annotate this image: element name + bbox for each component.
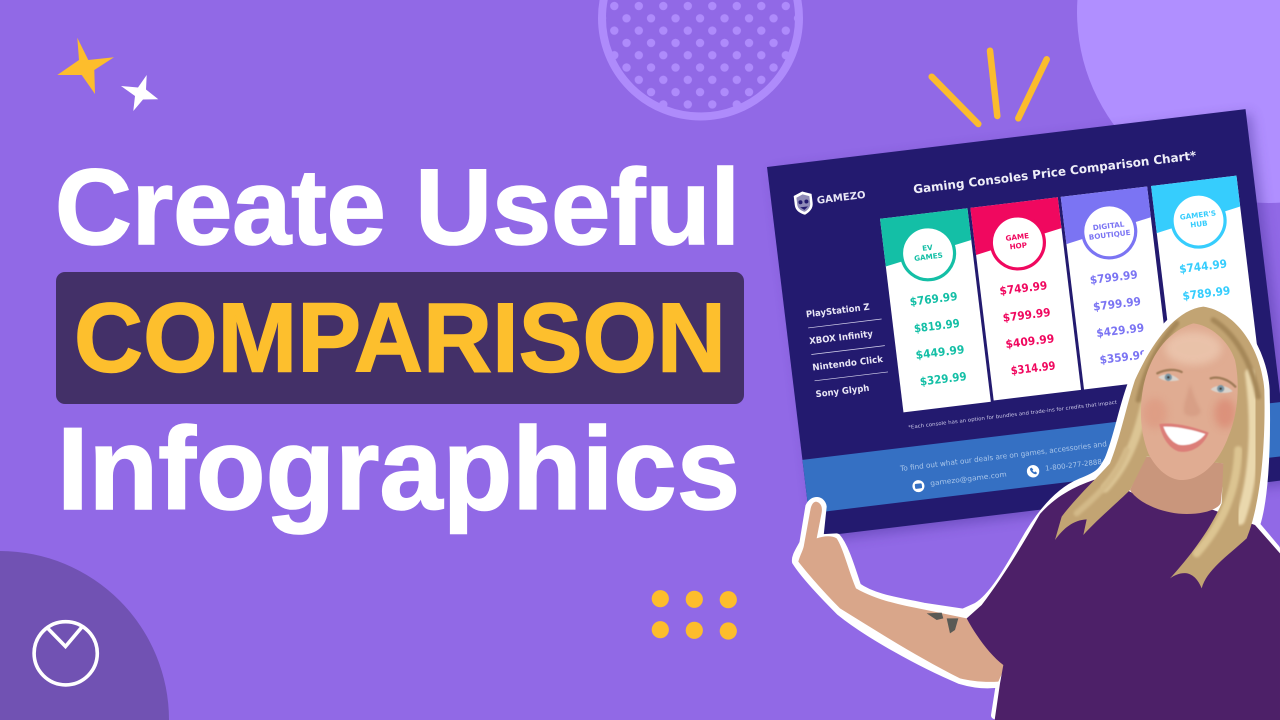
smile — [1159, 424, 1209, 452]
column: Digital Boutique: BOUTIQUE — [1088, 228, 1131, 242]
poster heading: Gaming Consoles Price Comparison Chart* — [912, 148, 1198, 197]
contact band: To find out what our deals are on games, accessories and — [899, 439, 1108, 473]
column: Gamer's Hub: $789.99 — [1182, 283, 1231, 303]
icon: white star — [121, 75, 158, 111]
contact band — [802, 402, 1280, 513]
decorative circle: bottom left — [0, 551, 169, 720]
row labels: XBOX Infinity — [809, 330, 874, 347]
column: Game Hop: $749.99 — [999, 278, 1048, 298]
column: Game Hop — [970, 197, 1081, 400]
blonde hair — [1055, 307, 1265, 588]
highlight banner: COMPARISON: COMPARISON — [74, 282, 726, 392]
arm and pointing hand — [798, 502, 1007, 682]
column: Game Hop: $799.99 — [1002, 305, 1051, 325]
title line: Create Useful: Create Useful — [55, 146, 740, 267]
presenter cut-out: smiling woman pointing — [796, 305, 1280, 720]
eyebrows — [1157, 370, 1182, 373]
row labels — [806, 301, 890, 400]
row labels: Nintendo Click — [812, 355, 885, 373]
poster logo: GAMEZO: GAMEZO — [816, 190, 866, 207]
column: Gamer's Hub — [1151, 176, 1260, 379]
poster logo: GAMEZO — [793, 184, 867, 216]
column: Digital Boutique — [1061, 186, 1170, 390]
white sticker outline — [796, 305, 1276, 715]
row labels: Sony Glyph — [815, 384, 870, 400]
column: Digital Boutique: $799.99 — [1089, 267, 1138, 287]
column: Digital Boutique: $799.99 — [1092, 294, 1142, 314]
footnote: *Each console has an option for bundles and trade-ins for credits that impact — [908, 400, 1117, 431]
column: EV Games: $449.99 — [915, 342, 965, 362]
column: EV Games: EV — [922, 243, 934, 253]
icon: yellow star — [57, 38, 114, 94]
tattoo — [927, 613, 958, 633]
contact band: gamezo@game.com — [930, 470, 1007, 488]
purple t-shirt — [967, 477, 1280, 720]
row labels: PlayStation Z — [806, 303, 871, 320]
contact band: 1-800-277-2888 — [1045, 458, 1102, 473]
poster drop shadow — [773, 113, 1280, 542]
column: EV Games: GAMES — [914, 251, 943, 263]
column: Digital Boutique: $359.99 — [1099, 347, 1148, 367]
column: EV Games — [880, 208, 991, 412]
panel: tilted price comparison poster — [767, 109, 1280, 537]
column: Gamer's Hub: GAMER'S — [1179, 208, 1217, 222]
brand logo: clock icon — [34, 622, 97, 685]
column: Digital Boutique: DIGITAL — [1092, 219, 1125, 232]
column: EV Games: $769.99 — [909, 289, 958, 309]
decorative yellow dot grid — [652, 590, 737, 640]
icon: yellow spark lines — [932, 51, 1047, 124]
column: Game Hop: $314.99 — [1010, 358, 1056, 378]
column: Gamer's Hub: HUB — [1190, 219, 1208, 230]
title line: Infographics: Infographics — [57, 403, 740, 534]
column: Game Hop: HOP — [1009, 240, 1027, 251]
decorative dotted circle: top — [602, 0, 800, 117]
column: EV Games: $819.99 — [913, 316, 960, 335]
column: Digital Boutique: $429.99 — [1096, 320, 1145, 340]
neck — [1130, 457, 1225, 514]
column: EV Games: $329.99 — [919, 369, 967, 389]
column: Game Hop: $409.99 — [1005, 331, 1055, 351]
face — [1141, 323, 1238, 480]
decorative circle: top right — [1077, 0, 1280, 203]
eyes — [1158, 374, 1179, 381]
column: Gamer's Hub: $744.99 — [1178, 256, 1228, 276]
column: Game Hop: GAME — [1005, 231, 1030, 243]
